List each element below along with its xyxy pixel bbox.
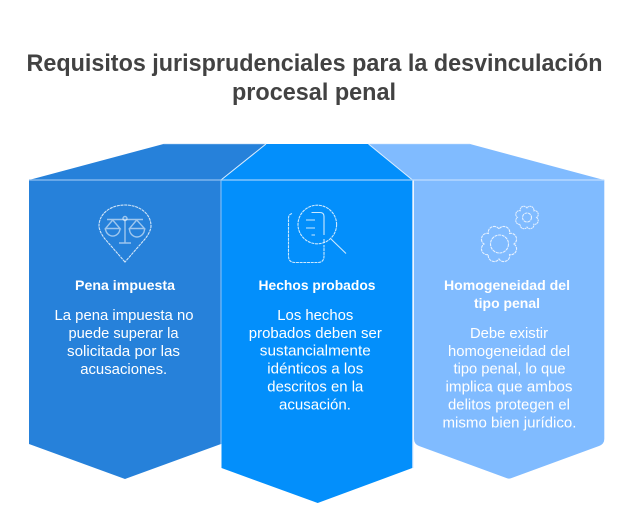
body text: homogeneidad: mismo bien jurídico. [442, 414, 576, 432]
body text: pena impuesta: La pena impuesta no [54, 307, 194, 324]
body text: homogeneidad: homogeneidad del [448, 343, 570, 360]
body text: hechos probados: idénticos a los [267, 360, 363, 378]
body text: hechos probados: acusación. [279, 396, 351, 413]
left panel roof [29, 144, 266, 180]
body text: homogeneidad: implica que ambos [446, 378, 572, 396]
title [26, 50, 602, 106]
heading: homogeneidad del tipo penal: Homogeneidad del [444, 277, 570, 293]
body text: pena impuesta: acusaciones. [80, 361, 167, 378]
body text: pena impuesta: solicitada por las [67, 343, 180, 360]
heading: hechos probados: Hechos probados [258, 277, 376, 293]
icon: scales in map pin [99, 205, 151, 262]
body text: hechos probados: Los hechos [277, 307, 353, 324]
panel: pena impuesta [29, 144, 266, 479]
body text: pena impuesta [54, 307, 194, 378]
heading: homogeneidad del tipo penal: tipo penal [474, 295, 540, 311]
title: Requisitos jurisprudenciales para la desvinculación [26, 50, 602, 77]
panel: homogeneidad del tipo penal [368, 144, 604, 479]
icon: gears [481, 206, 538, 262]
body text: hechos probados: sustancialmente [260, 343, 371, 360]
body text: pena impuesta: puede superar la [68, 325, 179, 342]
right panel roof [368, 144, 604, 180]
body text: homogeneidad [442, 325, 576, 432]
body text: hechos probados: descritos en la [267, 378, 364, 396]
right panel body [414, 180, 604, 479]
center panel roof [221, 144, 412, 180]
left panel body [29, 180, 221, 479]
heading: pena impuesta: Pena impuesta [75, 277, 175, 293]
heading: homogeneidad del tipo penal [444, 277, 570, 311]
icon: document with magnifier [288, 205, 346, 262]
body text: homogeneidad: Debe existir [470, 325, 548, 342]
body text: homogeneidad: tipo penal, lo que [454, 360, 566, 378]
body text: hechos probados: probados deben ser [249, 325, 382, 342]
body text: hechos probados [249, 307, 382, 413]
panel: hechos probados [221, 144, 413, 503]
center panel body [222, 180, 412, 503]
title: procesal penal [232, 79, 396, 106]
body text: homogeneidad: delitos protegen el [448, 396, 570, 414]
